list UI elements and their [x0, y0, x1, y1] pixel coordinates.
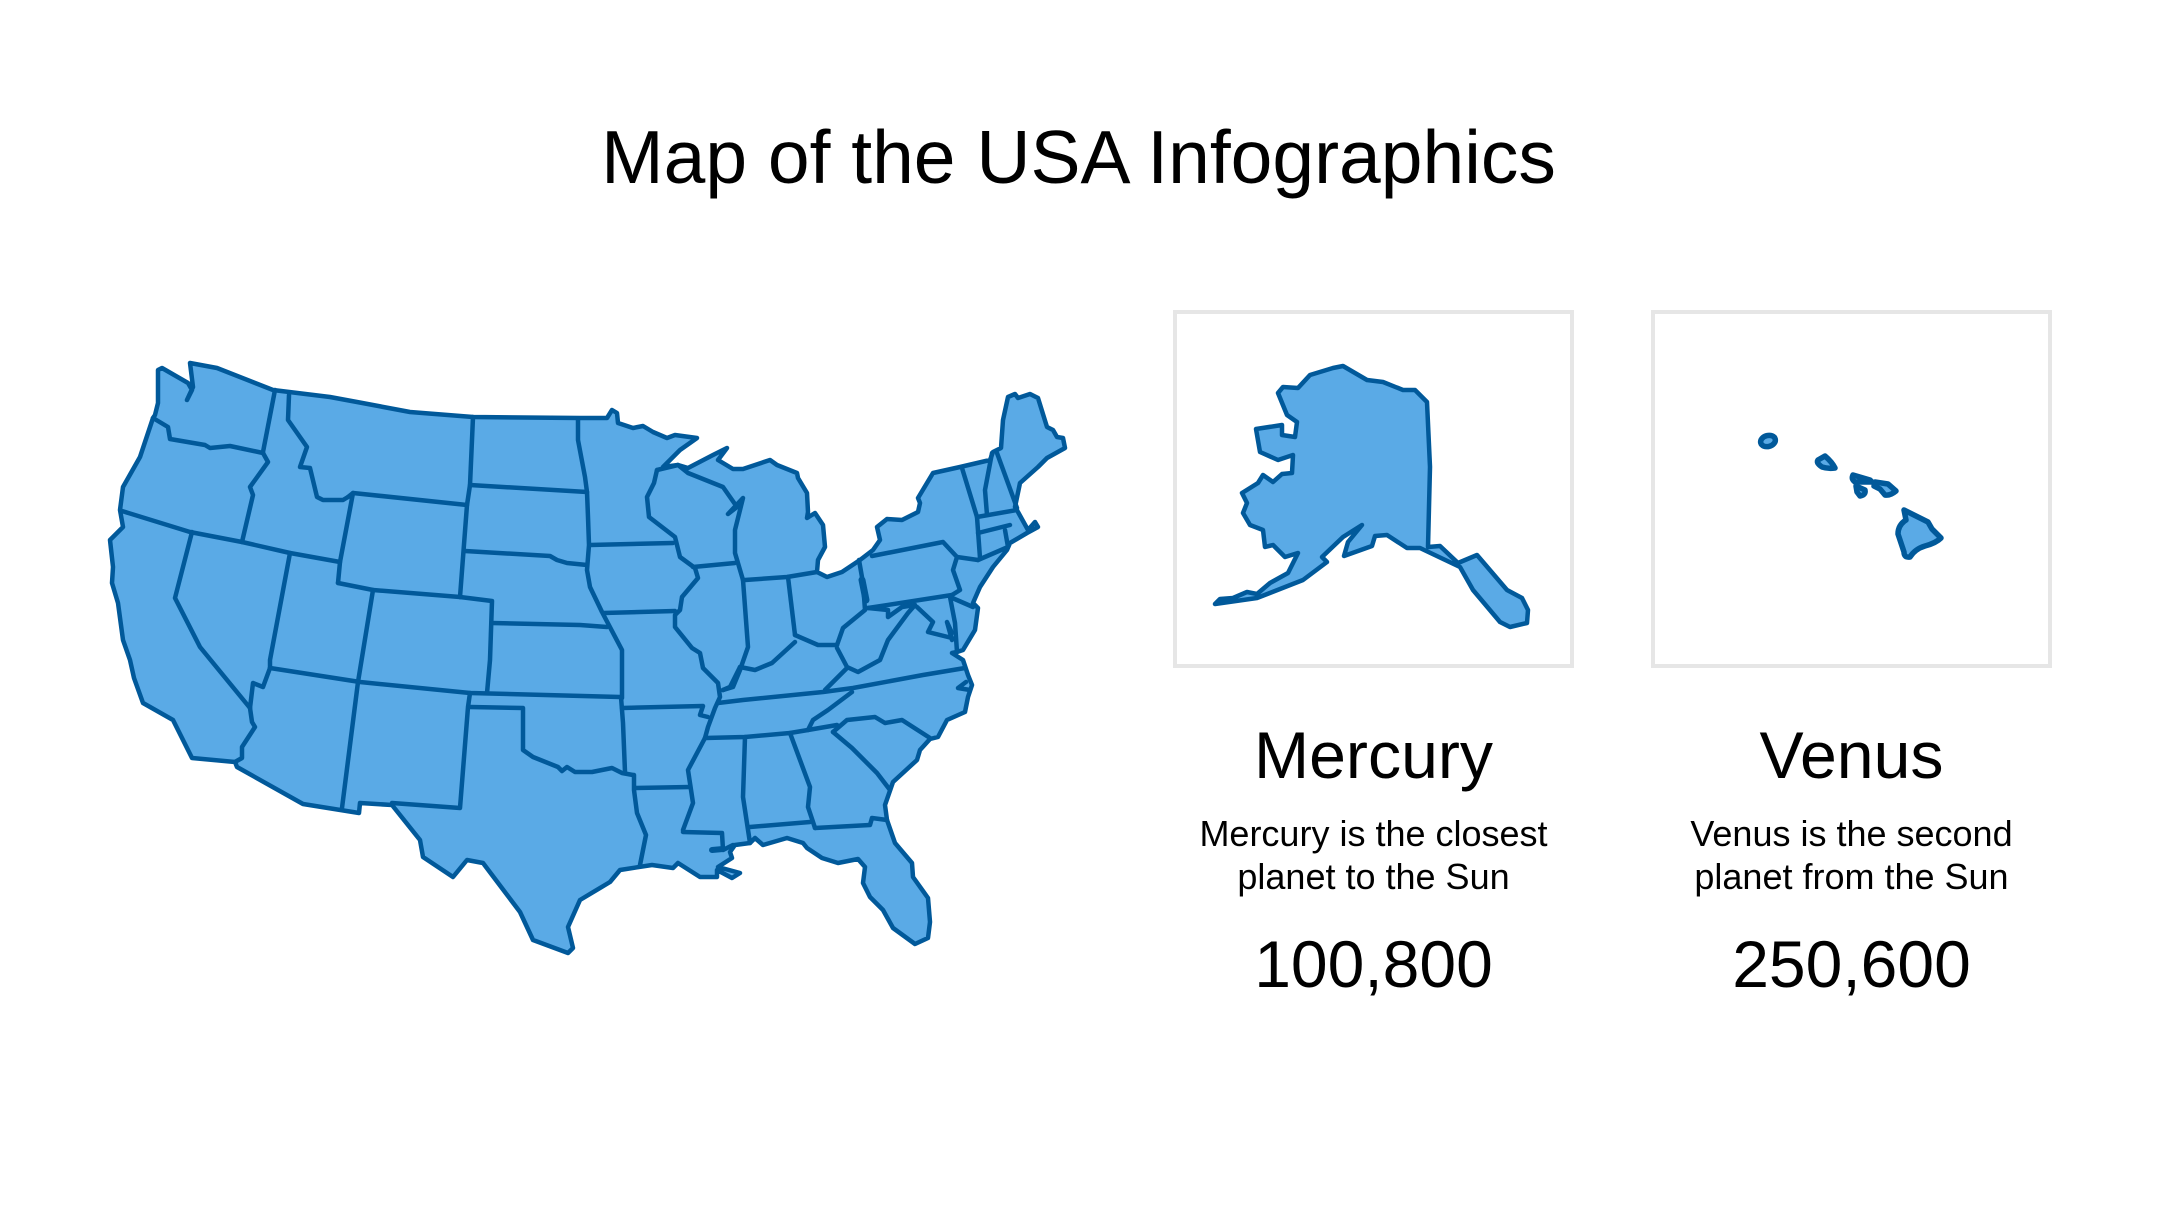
text: Mercury description — [1199, 813, 1548, 897]
panel: Hawaii frame — [1651, 310, 2052, 668]
stat: Venus value: 250,600 — [1732, 927, 1971, 1001]
stat: Mercury value: 100,800 — [1254, 927, 1493, 1001]
text: Mercury description: Mercury is the closest — [1199, 813, 1548, 854]
text: Venus description: Venus is the second — [1690, 813, 2013, 854]
map: Hawaii — [1759, 434, 1941, 557]
text: Venus description — [1690, 813, 2013, 897]
text: Mercury description: planet to the Sun — [1237, 856, 1510, 897]
map: Alaska — [1215, 366, 1528, 627]
text: Venus description: planet from the Sun — [1694, 856, 2009, 897]
heading: Venus: Venus — [1759, 719, 1944, 793]
heading: Mercury: Mercury — [1254, 719, 1493, 793]
map: contiguous USA — [110, 363, 1065, 953]
panel: Alaska frame — [1173, 310, 1574, 668]
title: Map of the USA Infographics — [601, 115, 1556, 199]
